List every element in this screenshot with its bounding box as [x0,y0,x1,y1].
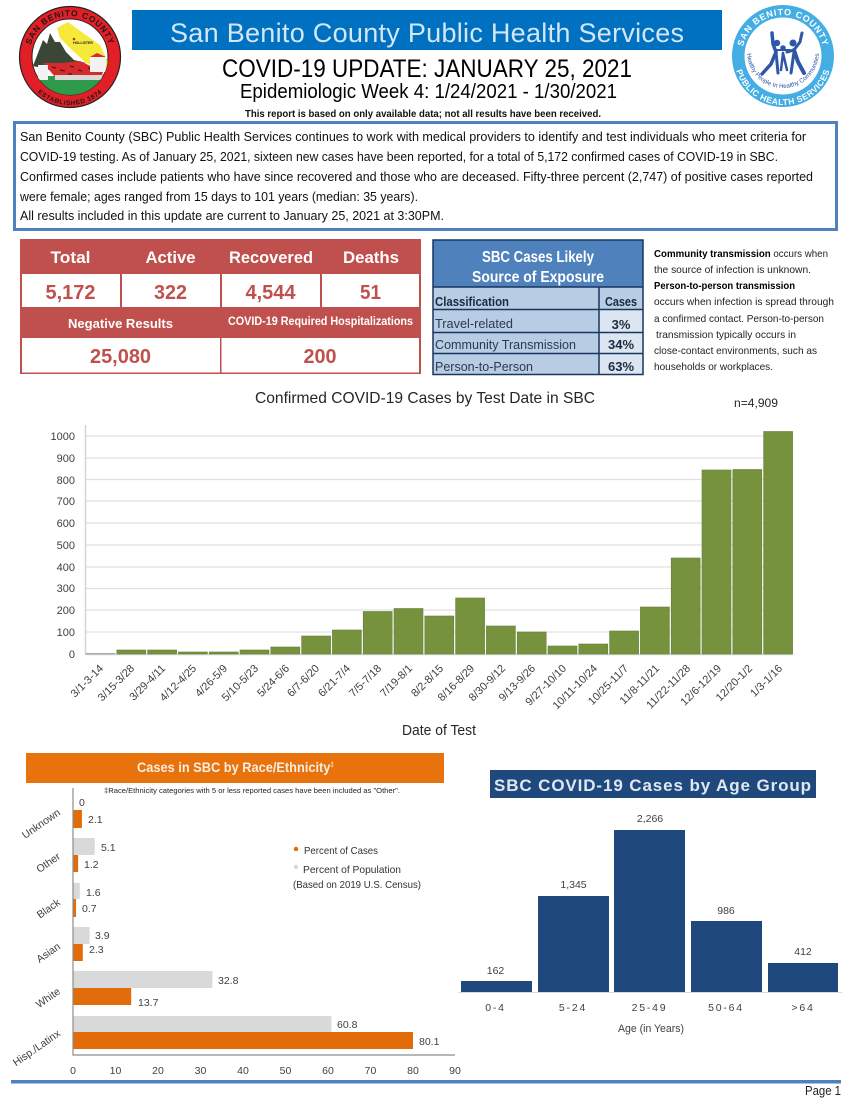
bar chart: cases by test date: 5/10-5/23 [220,663,261,704]
panel: case totals table: Total [50,248,90,267]
panel: summary text: All results included in this update are current to January 25, 2021 at 3:30PM. [20,208,444,223]
heading: epidemiologic week: Epidemiologic Week 4: 1/24/2021 - 1/30/2021 [240,81,617,103]
panel: likely source of exposure table: Classification [435,294,509,309]
sample size note: n=4,909 [734,396,778,410]
bar chart: race/ethnicity: 80.1 [419,1036,440,1048]
panel: likely source of exposure table: SBC Cases Likely [482,249,594,266]
bar chart: race/ethnicity [11,788,461,1077]
bar chart: race/ethnicity: 13.7 [138,997,159,1009]
legend: race/ethnicity: Percent of Population [303,864,401,876]
panel: likely source of exposure table: 63% [608,359,634,374]
bar chart: age group: 2,266 [637,813,663,825]
bar chart: race/ethnicity: 60 [322,1065,334,1077]
bar chart: cases by test date: 8/16-8/29 [436,663,477,704]
panel: likely source of exposure table: 3% [612,317,631,332]
bar chart: cases by test date: 9/27-10/10 [523,663,569,708]
bar chart: age group: 5-24 [559,1002,587,1014]
bar chart: race/ethnicity: 2.3 [89,944,104,956]
bar chart: cases by test date: 10/25-11/7 [586,663,631,708]
bar chart: cases by test date: 700 [57,496,75,508]
legend: race/ethnicity [293,845,421,891]
bar chart: cases by test date: 200 [57,605,75,617]
logo: San Benito County seal: SAN BENITO COUNTY [26,10,114,44]
legend: race/ethnicity: (Based on 2019 U.S. Census) [293,879,421,891]
bar chart: race/ethnicity: White [34,986,63,1011]
heading: age group [490,770,816,798]
axis title: date of test: Date of Test [402,723,476,739]
bar chart: race/ethnicity: 10 [110,1065,121,1077]
bar chart: race/ethnicity: 3.9 [95,930,110,942]
bar chart: cases by test date: 500 [57,540,75,552]
bar chart: race/ethnicity: Black [35,896,63,921]
bar chart: age group: 0-4 [485,1002,506,1014]
bar chart: race/ethnicity: Asian [34,941,63,966]
bar chart: cases by test date: 11/22-11/28 [644,663,693,711]
bar chart: cases by test date: 7/19-8/1 [378,663,415,700]
bar chart: cases by test date: 4/26-5/9 [193,663,230,700]
bar chart: age group: >64 [791,1002,815,1014]
text block: transmission definitions: the source of infection is unknown. [654,264,811,276]
chart title: cases by test date: Confirmed COVID-19 Cases by Test Date in SBC [255,390,595,407]
bar chart: age group: 162 [487,965,504,977]
panel: likely source of exposure table: 34% [608,337,634,352]
panel: case totals table: COVID-19 Required Hospitalizations [228,316,413,328]
bar chart: cases by test date: 3/29-4/11 [127,663,168,703]
bar chart: age group: 50-64 [708,1002,744,1014]
bar chart: race/ethnicity: 90 [449,1065,461,1077]
heading: update date: COVID-19 UPDATE: JANUARY 25, 2021 [222,55,632,83]
panel: case totals table: 51 [360,282,381,304]
panel: summary text: San Benito County (SBC) Public Health Services continues to work with medical providers to identify and test individuals who meet criteria for [20,129,807,144]
panel: case totals table: Active [146,248,196,267]
panel: case totals table: 4,544 [246,282,296,304]
bar chart: race/ethnicity: 5.1 [101,842,116,854]
bar chart: cases by test date: 900 [57,453,75,465]
bar chart: cases by test date: 10/11-10/24 [551,663,600,712]
panel: likely source of exposure table: Person-to-Person [435,359,533,374]
panel: case totals table: Recovered [229,248,313,267]
bar chart: race/ethnicity: Other [34,850,63,876]
bar chart: cases by test date: 12/20-1/2 [714,663,755,704]
bar chart: cases by test date: 600 [57,518,75,530]
page number: Page 1 [805,1084,841,1098]
panel: case totals table: Deaths [343,248,399,267]
bar chart: race/ethnicity: Unknown [20,807,63,842]
logo: Public Health Services [732,5,834,107]
heading: age group: SBC COVID-19 Cases by Age Group [494,776,811,795]
logo: Public Health Services: SAN BENITO COUNTY [738,8,829,46]
panel: likely source of exposure table: Community Transmission [435,337,576,352]
text block: transmission definitions: transmission typically occurs in [656,329,796,341]
bar chart: race/ethnicity: 50 [280,1065,291,1077]
bar chart: cases by test date: 5/24-6/6 [255,663,292,700]
bar chart: cases by test date: 9/13-9/26 [497,663,538,704]
bar chart: race/ethnicity: 1.2 [84,859,99,871]
bar chart: age group [458,813,842,1014]
logo: San Benito County seal: HOLLISTER [73,41,93,45]
bar chart: race/ethnicity: 32.8 [218,975,239,987]
heading: race/ethnicity: Cases in SBC by Race/Ethnicity [137,759,349,775]
bar chart: race/ethnicity: 20 [152,1065,164,1077]
bar chart: race/ethnicity: 2.1 [88,814,103,826]
bar chart: race/ethnicity: 0.7 [82,903,97,915]
bar chart: cases by test date: 3/1-3-14 [69,663,106,700]
bar chart: cases by test date: 1000 [51,431,75,443]
text block: transmission definitions: Community transmission occurs when [654,248,828,260]
logo: Public Health Services: PUBLIC HEALTH SERVICES [736,69,829,105]
panel: summary text: Confirmed cases include patients who have since recovered and those who are deceased. Fifty-three percent (2,747) of positive cases reported [20,169,813,184]
text block: transmission definitions: households or workplaces. [654,361,773,373]
heading: race/ethnicity [26,753,444,783]
panel: summary text: COVID-19 testing. As of January 25, 2021, sixteen new cases have been reported, for a total of 5,172 confirmed cases of COVID-19 in SBC. [20,149,778,164]
bar chart: race/ethnicity: 70 [365,1065,376,1077]
bar chart: race/ethnicity: 1.6 [86,887,101,899]
bar chart: cases by test date: 8/30-9/12 [467,663,508,704]
panel: likely source of exposure table [433,240,643,375]
heading: race/ethnicity: ‡ [330,762,334,769]
data note: This report is based on only available data; not all results have been received. [245,108,601,120]
panel: case totals table: 25,080 [90,346,151,368]
text block: transmission definitions: close-contact environments, such as [654,345,817,357]
panel: summary text [14,122,836,230]
logo: Public Health Services: Healthy People In Healthy Communities [747,54,819,88]
panel: likely source of exposure table: Source of Exposure [472,269,604,286]
bar chart: age group: 25-49 [632,1002,667,1014]
bar chart: cases by test date: 800 [57,475,75,487]
panel: case totals table: 322 [154,282,187,304]
bar chart: cases by test date: 7/5-7/18 [347,663,384,700]
bar chart: race/ethnicity: 0 [79,797,85,809]
bar chart: cases by test date: 11/8-11/21 [618,663,662,707]
text block: transmission definitions: occurs when infection is spread through [654,296,834,308]
bar chart: cases by test date: 0 [69,649,75,661]
bar chart: cases by test date [51,425,793,712]
panel: case totals table: Negative Results [68,316,173,331]
bar chart: race/ethnicity: 40 [237,1065,249,1077]
bar chart: age group: 412 [794,946,812,958]
title banner [132,10,722,50]
bar chart: age group: 1,345 [560,879,587,891]
bar chart: cases by test date: 4/12-4/25 [158,663,199,704]
bar chart: age group: 986 [717,905,735,917]
text block: transmission definitions: a confirmed contact. Person-to-person [654,313,824,325]
bar chart: cases by test date: 8/2-8/15 [409,663,446,700]
panel: likely source of exposure table: Travel-related [435,316,513,331]
bar chart: cases by test date: 400 [57,562,75,574]
panel: case totals table [20,239,421,374]
text block: transmission definitions [654,248,834,373]
bar chart: cases by test date: 300 [57,583,75,595]
bar chart: race/ethnicity: 0 [70,1065,76,1077]
bar chart: race/ethnicity: Hisp./Latinx [11,1027,63,1069]
bar chart: cases by test date: 3/15-3/28 [96,663,137,704]
panel: likely source of exposure table: Cases [605,294,637,309]
panel: summary text: were female; ages ranged from 15 days to 101 years (median: 35 years). [19,189,418,204]
panel: case totals table: 5,172 [46,282,96,304]
bar chart: cases by test date: 6/21-7/4 [316,663,353,700]
axis title: age: Age (in Years) [618,1023,684,1035]
footnote: race categories: ‡Race/Ethnicity categories with 5 or less reported cases have been included as "Other". [104,786,400,795]
footer rule [11,1080,841,1084]
logo: San Benito County seal [18,6,122,108]
bar chart: cases by test date: 12/6-12/19 [678,663,724,708]
bar chart: cases by test date: 6/7-6/20 [285,663,322,700]
logo: San Benito County seal: ESTABLISHED 1874 [38,89,102,106]
bar chart: race/ethnicity: 80 [407,1065,419,1077]
legend: race/ethnicity: Percent of Cases [304,845,378,857]
bar chart: cases by test date: 100 [57,627,75,639]
title banner: San Benito County Public Health Services [170,18,684,48]
bar chart: race/ethnicity: 30 [195,1065,206,1077]
bar chart: race/ethnicity: 60.8 [337,1019,358,1031]
panel: case totals table: 200 [304,346,336,368]
bar chart: cases by test date: 1/3-1/16 [748,663,785,700]
text block: transmission definitions: Person-to-person transmission [654,280,795,292]
